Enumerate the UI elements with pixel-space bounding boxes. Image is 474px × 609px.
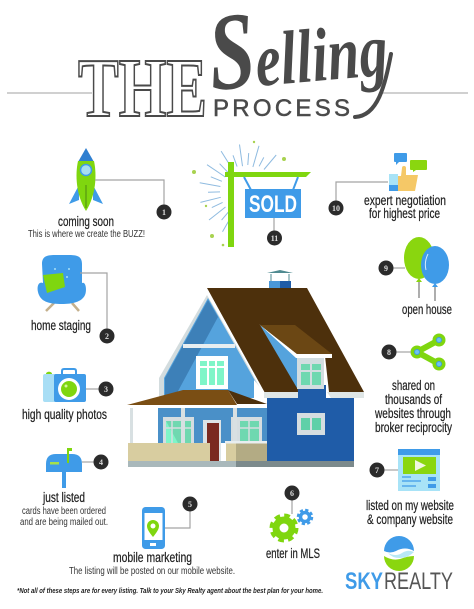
step 2 number: 2 <box>105 332 109 341</box>
step 6 number: 6 <box>290 489 294 498</box>
connector 10 <box>336 182 388 201</box>
eave trim <box>264 392 364 398</box>
step 8 label: thousands of <box>385 392 442 407</box>
footnote: *Not all of these steps are for every listing. Talk to your Sky Realty agent about the best plan for your home. <box>17 588 323 595</box>
step 3 number <box>98 382 114 396</box>
step 1 number <box>156 204 172 220</box>
connector 7 <box>384 469 398 471</box>
wall window <box>297 413 325 435</box>
step 6: gears icon <box>272 510 312 540</box>
step 3: camera icon <box>43 369 86 402</box>
connector 1 <box>95 180 164 205</box>
step 4 label: cards have been ordered <box>22 506 106 517</box>
step 10: thumbs up and chat icon <box>389 153 427 191</box>
step 5 label <box>69 550 235 577</box>
step 4 label: and are being mailed out. <box>20 517 108 528</box>
connector 4 <box>82 461 94 463</box>
step 8 label <box>374 378 452 435</box>
step 5: phone icon <box>142 507 165 549</box>
step 4: mailbox icon <box>46 448 82 488</box>
step 7 label <box>366 498 454 527</box>
step 6 number <box>284 486 300 500</box>
porch <box>127 390 354 467</box>
title: PROCESS <box>213 95 350 122</box>
title <box>78 0 391 135</box>
dormer <box>259 324 332 389</box>
house illustration <box>127 270 364 467</box>
gable window <box>196 356 228 389</box>
step 5 label: The listing will be posted on our mobile website. <box>69 566 235 577</box>
step 3 number: 3 <box>104 385 108 394</box>
step 9: balloons icon <box>404 237 449 301</box>
step 5 number <box>182 496 198 512</box>
step 4 label: just listed <box>42 490 85 505</box>
step 10 label: expert negotiation <box>364 193 446 208</box>
step 8 label: shared on <box>392 378 435 393</box>
Sky Realty logo <box>345 536 453 595</box>
step 9 number: 9 <box>384 264 388 273</box>
connector 11 <box>273 218 275 231</box>
step 11 number <box>267 230 282 246</box>
chimney <box>267 270 293 299</box>
step 8: share icon <box>410 334 446 370</box>
connector 5 <box>165 511 190 528</box>
step 11: sold sign icon <box>192 141 311 247</box>
connector 8 <box>396 351 411 353</box>
step 2 label: home staging <box>31 318 91 333</box>
step 7 number: 7 <box>375 466 379 475</box>
main roof <box>207 288 364 392</box>
step 11: sold sign icon: SOLD <box>249 191 297 218</box>
step 2 number <box>100 328 114 344</box>
step 1 label: This is where we create the BUZZ! <box>28 229 145 240</box>
connector 6 <box>291 500 293 514</box>
step 3 label: high quality photos <box>22 407 107 422</box>
step 10 number <box>328 200 344 216</box>
gable wall <box>159 295 264 398</box>
step 4 label <box>20 490 108 528</box>
step 7 number <box>370 462 384 478</box>
step 10 label <box>364 193 446 221</box>
step 8 number: 8 <box>387 348 391 357</box>
step 8 number <box>382 344 396 360</box>
step 9 label: open house <box>402 302 452 317</box>
step 5 number: 5 <box>188 500 192 509</box>
step 1 label: coming soon <box>58 214 114 229</box>
connector 3 <box>86 388 99 390</box>
step 7: video page icon <box>398 449 440 491</box>
Sky Realty logo: REALTY <box>384 568 453 595</box>
Sky Realty logo: SKY <box>345 568 383 595</box>
right wall <box>267 385 354 461</box>
step 5 label: mobile marketing <box>113 550 192 565</box>
step 1 number: 1 <box>162 208 166 217</box>
step 10 number: 10 <box>332 204 340 213</box>
step 4 number: 4 <box>99 458 103 467</box>
step 2: armchair icon <box>38 255 86 311</box>
connector 2 <box>80 273 107 329</box>
step 4 number <box>94 454 108 470</box>
step 1: rocket icon <box>69 148 103 211</box>
step 11 number: 11 <box>271 234 278 243</box>
title: THE <box>78 42 207 135</box>
step 9 number <box>378 260 394 276</box>
step 1 label <box>28 214 145 240</box>
connector 9 <box>393 267 405 269</box>
step 10 label: for highest price <box>369 206 440 221</box>
step 6 label: enter in MLS <box>266 546 320 561</box>
